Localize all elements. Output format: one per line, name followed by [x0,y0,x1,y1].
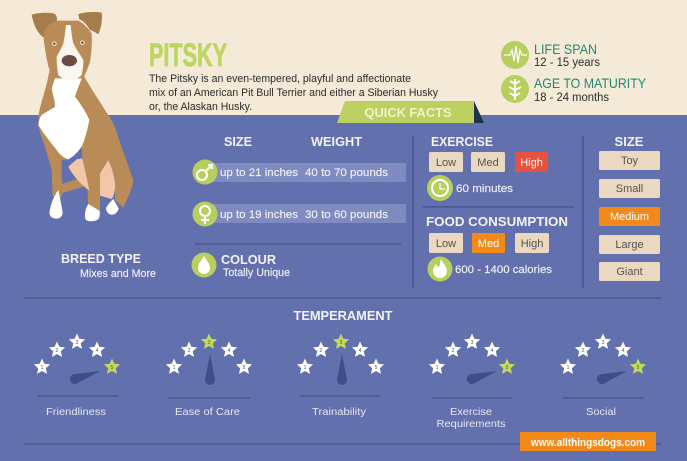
size and weight headings: WEIGHT [311,134,362,149]
food consumption [426,214,568,282]
exercise: 60 minutes [456,183,514,195]
size and weight headings: SIZE [224,134,252,149]
male row [192,160,406,184]
female row [192,202,406,226]
gauge: exercise requirements: 2 [452,348,455,354]
colour: Totally Unique [223,267,290,279]
exercise: Med [477,157,499,169]
life span: LIFE SPAN [534,41,597,57]
gauge: trainability: 5 [375,365,378,371]
exercise: EXERCISE [431,134,493,149]
age to maturity: 18 - 24 months [534,92,609,104]
colour: COLOUR [221,252,277,267]
dog size scale: Small [616,183,643,195]
food consumption: 600 - 1400 calories [455,264,553,276]
food consumption: Low [436,238,456,250]
breed type: Mixes and More [80,268,156,280]
gauge: friendliness: 3 [76,340,79,346]
gauge: social: 1 [567,365,570,371]
gauge: exercise requirements: 1 [436,365,439,371]
gauge: ease of care: 1 [173,365,176,371]
gauge: friendliness: Friendliness [46,406,106,418]
description [149,73,438,113]
exercise: High [520,157,543,169]
gauge: social: 5 [637,365,640,371]
gauge: social [560,334,646,418]
dog size scale: SIZE [615,134,644,149]
exercise [427,134,548,201]
gauge: trainability: Trainability [312,406,367,418]
gauge: exercise requirements: 5 [506,365,509,371]
gauge: exercise requirements: 4 [491,348,494,354]
gauge: friendliness: 2 [56,348,59,354]
dog size scale [599,134,660,281]
dog size scale: Large [615,239,644,251]
dog size scale: Medium [610,211,649,223]
gauge: exercise requirements: Requirements [436,418,506,430]
dog size scale: Giant [616,266,643,278]
gauge: ease of care: 2 [188,348,191,354]
size and weight headings [224,134,362,149]
male row: 40 to 70 pounds [305,167,389,179]
colour [192,252,290,279]
gauge: trainability [297,334,384,418]
website badge: www.allthingsdogs.com [530,437,645,449]
gauge: social: Social [586,406,616,418]
food consumption: FOOD CONSUMPTION [426,214,568,229]
gauge: social: 2 [582,348,585,354]
description: The Pitsky is an even-tempered, playful and affectionate [149,73,411,85]
life span: 12 - 15 years [534,57,600,69]
gauge: ease of care: 5 [243,365,246,371]
quick facts banner [337,101,484,123]
gauge: trainability: 1 [304,365,307,371]
website badge [520,432,656,451]
gauge: friendliness: 4 [96,348,99,354]
gauge: exercise requirements: Exercise [450,406,492,418]
gauge: social: 4 [622,348,625,354]
gauge: exercise requirements: 3 [471,340,474,346]
exercise: Low [436,157,456,169]
food consumption: High [521,238,543,250]
food consumption: Med [478,238,499,250]
gauge: ease of care: Ease of Care [175,406,240,418]
title: PITSKY [149,37,227,73]
gauge: exercise requirements [429,334,515,430]
gauge: trainability: 4 [359,348,362,354]
gauge: trainability: 2 [320,348,323,354]
gauge: ease of care: 4 [228,348,231,354]
gauge: friendliness: 1 [41,365,44,371]
male row: up to 21 inches [220,167,299,179]
breed type: BREED TYPE [61,251,141,266]
female row: up to 19 inches [220,209,299,221]
age to maturity [501,75,647,104]
breed type [61,251,156,280]
dog illustration [32,12,133,221]
gauge: ease of care [166,334,252,418]
life span [501,41,600,69]
temperament heading: TEMPERAMENT [294,308,393,323]
gauge: trainability: 3 [340,340,343,346]
gauge: social: 3 [602,340,605,346]
gauge: friendliness: 5 [111,365,114,371]
quick facts banner: QUICK FACTS [364,105,452,120]
female row: 30 to 60 pounds [305,209,389,221]
dog size scale: Toy [621,155,639,167]
gauge: friendliness [34,334,120,418]
header background [0,0,687,115]
age to maturity: AGE TO MATURITY [534,75,647,91]
main background [0,115,687,461]
gauge: ease of care: 3 [208,340,211,346]
description: mix of an American Pit Bull Terrier and either a Siberian Husky [149,87,438,99]
description: or, the Alaskan Husky. [149,101,252,113]
